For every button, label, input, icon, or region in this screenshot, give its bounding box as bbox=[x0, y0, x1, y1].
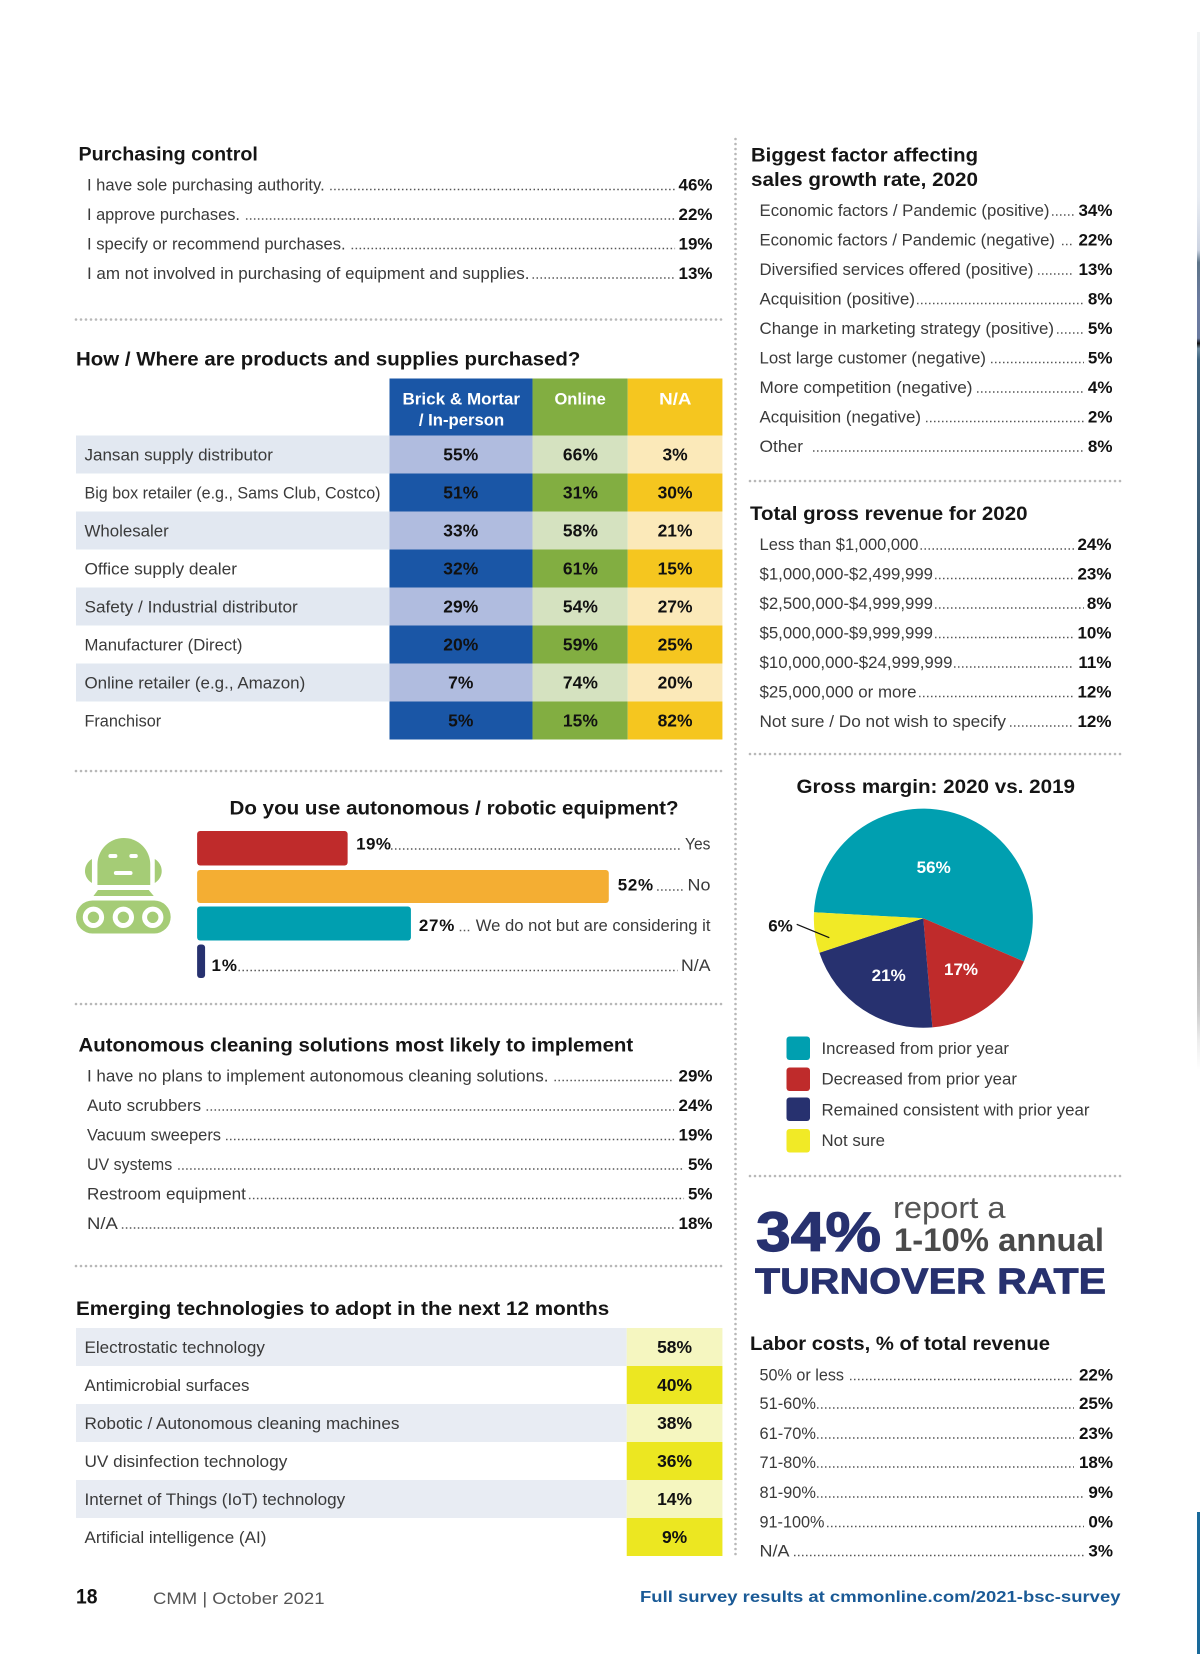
footer: survey link: Full survey results at cmmonline.com/2021-bsc-survey bbox=[640, 1589, 1121, 1606]
row: 91-100% bbox=[760, 1512, 1113, 1532]
row: N/A: 3% bbox=[1088, 1542, 1113, 1560]
row: 5M-10M: $5,000,000-$9,999,999 bbox=[760, 624, 933, 642]
legend: not sure: Not sure bbox=[822, 1131, 885, 1150]
panel: labor costs bbox=[750, 1333, 1113, 1560]
row: marketing strategy: 5% bbox=[1088, 319, 1112, 338]
row: approve purchases bbox=[87, 205, 712, 224]
table row: Wholesaler: Wholesaler bbox=[84, 521, 169, 541]
row: restroom equipment: Restroom equipment bbox=[87, 1184, 246, 1204]
row: UV systems bbox=[87, 1155, 712, 1174]
table header: columns: Online bbox=[554, 389, 606, 409]
legend: increased bbox=[786, 1036, 1009, 1060]
table row: Franchisor: 5% bbox=[448, 710, 474, 731]
row: not sure: Not sure / Do not wish to specify bbox=[760, 712, 1006, 731]
row: no plans: I have no plans to implement autonomous cleaning solutions. bbox=[87, 1066, 548, 1086]
row: 10M-25M: $10,000,000-$24,999,999 bbox=[760, 653, 952, 672]
row: auto scrubbers: 24% bbox=[679, 1096, 712, 1115]
heading: labor costs: Labor costs, % of total revenue bbox=[750, 1333, 1050, 1355]
row: economic negative: Economic factors / Pandemic (negative) bbox=[760, 230, 1055, 250]
pie chart: 56% bbox=[917, 858, 951, 877]
row: other bbox=[760, 437, 1112, 456]
row: restroom equipment bbox=[87, 1184, 712, 1204]
row: acquisition positive: Acquisition (positive) bbox=[760, 290, 915, 308]
bar: N/A 1% bbox=[197, 944, 711, 978]
table row: IoT bbox=[76, 1480, 722, 1518]
row: 10M-25M: 11% bbox=[1078, 653, 1112, 672]
table row: electrostatic: Electrostatic technology bbox=[84, 1338, 265, 1357]
bar: yes 19%: 19% bbox=[356, 834, 391, 854]
table row: Office supply dealer bbox=[84, 550, 722, 588]
row: 2.5M-5M bbox=[760, 594, 1112, 613]
row: diversified services: 13% bbox=[1078, 260, 1112, 279]
row: specify or recommend: 19% bbox=[679, 234, 712, 254]
row: other: Other bbox=[760, 437, 803, 456]
callout: 34% turnover rate: report a bbox=[893, 1190, 1006, 1225]
table header: columns: Brick & Mortar bbox=[402, 389, 520, 409]
table row: antimicrobial: 40% bbox=[657, 1375, 692, 1395]
table row: UV disinfection bbox=[84, 1442, 722, 1480]
heading: biggest factor: Biggest factor affecting bbox=[751, 144, 978, 166]
panel: autonomous cleaning solutions bbox=[78, 1034, 712, 1233]
table row: Manufacturer (Direct) bbox=[84, 626, 722, 664]
table row: robotic: Robotic / Autonomous cleaning machines bbox=[84, 1414, 399, 1433]
heading: gross margin: Gross margin: 2020 vs. 2019 bbox=[796, 776, 1075, 798]
row: 61-70%: 23% bbox=[1079, 1424, 1113, 1443]
heading: autonomous cleaning solutions: Autonomous cleaning solutions most likely to implement bbox=[78, 1034, 634, 1057]
bar: considering 27% bbox=[197, 906, 711, 940]
row: 5M-10M bbox=[760, 624, 1112, 642]
legend: decreased bbox=[786, 1068, 1017, 1091]
row: lost large customer bbox=[760, 348, 1112, 368]
bar: N/A 1%: 1% bbox=[212, 956, 237, 975]
row: 71-80%: 18% bbox=[1079, 1453, 1113, 1472]
callout: 34% turnover rate: 1-10% annual bbox=[894, 1222, 1104, 1258]
panel: purchasing control bbox=[78, 143, 712, 283]
row: vacuum sweepers: 19% bbox=[679, 1125, 712, 1145]
row: 50% or less: 50% or less bbox=[760, 1366, 844, 1384]
row: 91-100%: 91-100% bbox=[760, 1512, 824, 1532]
row: vacuum sweepers bbox=[87, 1125, 712, 1145]
table row: Franchisor bbox=[84, 702, 722, 740]
table row: Online retailer: 74% bbox=[563, 672, 598, 693]
table row: Office supply dealer: Office supply dealer bbox=[84, 559, 237, 579]
row: not involved: I am not involved in purchasing of equipment and supplies. bbox=[87, 264, 530, 283]
pie chart: 6% bbox=[768, 916, 793, 936]
row: N/A: N/A bbox=[87, 1214, 119, 1233]
row: acquisition negative: Acquisition (negative) bbox=[760, 408, 921, 426]
table row: Jansan supply distributor: Jansan supply distributor bbox=[84, 445, 273, 465]
panel: total gross revenue bbox=[750, 503, 1112, 731]
table header: columns bbox=[389, 378, 722, 436]
legend: increased: Increased from prior year bbox=[822, 1039, 1009, 1058]
row: sole purchasing authority: 46% bbox=[679, 175, 712, 195]
table row: robotic: 38% bbox=[657, 1413, 692, 1433]
row: specify or recommend: I specify or recommend purchases. bbox=[87, 234, 346, 254]
table row: Online retailer bbox=[76, 664, 722, 702]
row: 61-70% bbox=[760, 1424, 1113, 1443]
table row: Office supply dealer: 15% bbox=[658, 558, 693, 579]
row: lost large customer: Lost large customer (negative) bbox=[760, 348, 986, 368]
row: acquisition negative: 2% bbox=[1088, 408, 1112, 426]
row: 5M-10M: 10% bbox=[1077, 624, 1112, 642]
row: less than 1M bbox=[760, 535, 1112, 554]
table row: electrostatic: 58% bbox=[657, 1337, 692, 1357]
table row: Online retailer: 20% bbox=[658, 672, 693, 693]
row: N/A: N/A bbox=[760, 1542, 790, 1560]
table row: antimicrobial: Antimicrobial surfaces bbox=[84, 1376, 249, 1395]
row: 71-80% bbox=[760, 1453, 1113, 1472]
callout: 34% turnover rate bbox=[755, 1190, 1106, 1302]
heading: emerging technologies: Emerging technologies to adopt in the next 12 months bbox=[76, 1298, 609, 1320]
row: acquisition positive: 8% bbox=[1088, 290, 1112, 308]
table row: IoT: 14% bbox=[657, 1489, 692, 1509]
row: 51-60%: 51-60% bbox=[760, 1394, 816, 1413]
table row: AI bbox=[84, 1518, 722, 1556]
row: auto scrubbers bbox=[87, 1096, 712, 1115]
row: no plans: 29% bbox=[679, 1066, 712, 1086]
row: marketing strategy: Change in marketing strategy (positive) bbox=[760, 319, 1054, 338]
legend: remained consistent: Remained consistent with prior year bbox=[822, 1100, 1090, 1120]
bar: yes 19% bbox=[197, 831, 710, 866]
table row: Wholesaler: 58% bbox=[563, 520, 598, 541]
footer: publication: CMM | October 2021 bbox=[153, 1589, 324, 1608]
pie chart: 21% bbox=[872, 966, 906, 985]
row: 91-100%: 0% bbox=[1088, 1512, 1113, 1532]
row: approve purchases: 22% bbox=[679, 205, 712, 224]
row: N/A bbox=[87, 1214, 712, 1233]
table row: Wholesaler: 21% bbox=[658, 520, 693, 541]
row: economic negative: 22% bbox=[1078, 230, 1112, 250]
row: acquisition positive bbox=[760, 290, 1112, 308]
row: less than 1M: 24% bbox=[1077, 535, 1112, 554]
row: specify or recommend bbox=[87, 234, 712, 254]
row: auto scrubbers: Auto scrubbers bbox=[87, 1096, 201, 1115]
row: 51-60% bbox=[760, 1394, 1113, 1413]
panel: emerging technologies bbox=[76, 1298, 722, 1556]
table row: Wholesaler: 33% bbox=[443, 520, 479, 541]
row: 50% or less: 22% bbox=[1079, 1366, 1113, 1384]
panel: biggest factor affecting sales growth bbox=[751, 144, 1112, 456]
table row: Safety / Industrial distributor: 27% bbox=[658, 596, 693, 617]
row: sole purchasing authority bbox=[87, 175, 712, 195]
heading: total gross revenue: Total gross revenue for 2020 bbox=[750, 503, 1028, 525]
table row: AI: Artificial intelligence (AI) bbox=[84, 1528, 266, 1547]
table row: Jansan supply distributor bbox=[76, 436, 722, 474]
row: N/A: 18% bbox=[679, 1214, 712, 1233]
row: 25M or more bbox=[760, 682, 1112, 702]
row: restroom equipment: 5% bbox=[688, 1184, 712, 1204]
table row: Office supply dealer: 32% bbox=[443, 558, 479, 579]
row: 25M or more: 12% bbox=[1077, 682, 1112, 702]
row: UV systems: 5% bbox=[688, 1155, 712, 1174]
table row: Franchisor: 82% bbox=[658, 710, 693, 731]
row: 50% or less bbox=[760, 1366, 1113, 1384]
table header: columns: N/A bbox=[659, 389, 692, 409]
row: 71-80%: 71-80% bbox=[760, 1453, 816, 1472]
row: 81-90%: 9% bbox=[1088, 1483, 1113, 1502]
row: more competition: 4% bbox=[1088, 378, 1112, 397]
row: 81-90% bbox=[760, 1483, 1113, 1502]
callout: 34% turnover rate: TURNOVER RATE bbox=[755, 1260, 1106, 1302]
table row: Big box retailer: 30% bbox=[658, 482, 693, 503]
row: UV systems: UV systems bbox=[87, 1155, 172, 1174]
table row: Office supply dealer: 61% bbox=[563, 558, 598, 579]
table row: UV disinfection: UV disinfection technology bbox=[84, 1452, 288, 1471]
pie chart: 17% bbox=[944, 960, 978, 979]
row: economic positive: 34% bbox=[1078, 201, 1112, 220]
table row: Big box retailer: 31% bbox=[563, 482, 598, 503]
table row: Franchisor: 15% bbox=[563, 710, 598, 731]
bar: no 52%: No bbox=[688, 875, 710, 895]
table row: UV disinfection: 36% bbox=[657, 1451, 692, 1471]
table row: Jansan supply distributor: 55% bbox=[443, 444, 479, 465]
panel: gross margin pie chart bbox=[768, 776, 1090, 1152]
row: lost large customer: 5% bbox=[1088, 348, 1112, 368]
row: not sure: 12% bbox=[1077, 712, 1112, 731]
icon: robot bbox=[76, 838, 171, 934]
table row: Franchisor: Franchisor bbox=[84, 711, 162, 731]
row: 81-90%: 81-90% bbox=[760, 1483, 816, 1502]
row: 61-70%: 61-70% bbox=[760, 1424, 816, 1443]
table row: Wholesaler bbox=[76, 512, 722, 550]
row: 1M-2.5M bbox=[760, 564, 1112, 584]
table row: Online retailer: 7% bbox=[448, 672, 474, 693]
table row: Big box retailer bbox=[84, 474, 722, 512]
table row: antimicrobial bbox=[84, 1366, 722, 1404]
table row: Safety / Industrial distributor: 54% bbox=[563, 596, 598, 617]
legend: decreased: Decreased from prior year bbox=[822, 1070, 1017, 1088]
table row: Online retailer: Online retailer (e.g., Amazon) bbox=[84, 673, 305, 693]
row: less than 1M: Less than $1,000,000 bbox=[760, 535, 918, 554]
legend: not sure bbox=[786, 1129, 885, 1152]
table row: Safety / Industrial distributor: Safety / Industrial distributor bbox=[84, 597, 298, 617]
row: other: 8% bbox=[1088, 437, 1112, 456]
row: not sure bbox=[760, 712, 1112, 731]
bar: considering 27%: We do not but are considering it bbox=[476, 916, 711, 935]
row: acquisition negative bbox=[760, 408, 1112, 426]
table row: Big box retailer: Big box retailer (e.g., Sams Club, Costco) bbox=[84, 483, 381, 503]
table row: Manufacturer (Direct): Manufacturer (Direct) bbox=[84, 635, 242, 655]
table row: Manufacturer (Direct): 20% bbox=[443, 634, 479, 655]
callout: 34% turnover rate: 34% bbox=[756, 1200, 881, 1263]
table header: columns: / In-person bbox=[419, 410, 504, 430]
bar: considering 27%: 27% bbox=[419, 916, 454, 935]
table row: IoT: Internet of Things (IoT) technology bbox=[84, 1490, 346, 1509]
bar: no 52%: 52% bbox=[618, 875, 653, 895]
table row: robotic bbox=[76, 1404, 722, 1442]
row: not involved: 13% bbox=[679, 264, 712, 283]
table row: electrostatic bbox=[76, 1328, 722, 1366]
heading line 2: sales growth rate, 2020 bbox=[751, 169, 978, 191]
table row: Manufacturer (Direct): 59% bbox=[563, 634, 598, 655]
bar: N/A 1%: N/A bbox=[681, 956, 711, 975]
row: economic positive: Economic factors / Pandemic (positive) bbox=[760, 201, 1050, 220]
row: 10M-25M bbox=[760, 653, 1112, 672]
pie chart bbox=[768, 809, 1033, 1028]
table row: AI: 9% bbox=[662, 1527, 688, 1547]
row: 2.5M-5M: $2,500,000-$4,999,999 bbox=[760, 594, 933, 613]
bar: no 52% bbox=[197, 870, 710, 903]
table row: Safety / Industrial distributor: 29% bbox=[443, 596, 479, 617]
row: approve purchases: I approve purchases. bbox=[87, 205, 240, 224]
row: 1M-2.5M: 23% bbox=[1077, 564, 1112, 584]
panel: how and where products are purchased bbox=[76, 348, 722, 740]
row: 2.5M-5M: 8% bbox=[1087, 594, 1112, 613]
row: 25M or more: $25,000,000 or more bbox=[760, 682, 916, 702]
row: diversified services: Diversified services offered (positive) bbox=[760, 260, 1034, 279]
footer: page number: 18 bbox=[76, 1586, 98, 1608]
table row: Jansan supply distributor: 3% bbox=[662, 444, 688, 465]
row: 1M-2.5M: $1,000,000-$2,499,999 bbox=[760, 564, 933, 584]
table row: Jansan supply distributor: 66% bbox=[563, 444, 598, 465]
table row: Safety / Industrial distributor bbox=[76, 588, 722, 626]
row: more competition: More competition (negative) bbox=[760, 378, 972, 397]
heading: purchasing control: Purchasing control bbox=[78, 143, 258, 166]
row: more competition bbox=[760, 378, 1112, 397]
heading: how where purchased: How / Where are products and supplies purchased? bbox=[76, 348, 580, 371]
bar: yes 19%: Yes bbox=[685, 834, 710, 854]
row: 51-60%: 25% bbox=[1079, 1394, 1113, 1413]
heading: do you use autonomous equipment: Do you use autonomous / robotic equipment? bbox=[230, 797, 679, 820]
table row: Big box retailer: 51% bbox=[443, 482, 479, 503]
panel: autonomous robotic equipment use bbox=[76, 797, 711, 978]
row: N/A bbox=[760, 1542, 1113, 1560]
row: vacuum sweepers: Vacuum sweepers bbox=[87, 1125, 221, 1145]
table row: Manufacturer (Direct): 25% bbox=[658, 634, 693, 655]
row: sole purchasing authority: I have sole purchasing authority. bbox=[87, 175, 325, 195]
